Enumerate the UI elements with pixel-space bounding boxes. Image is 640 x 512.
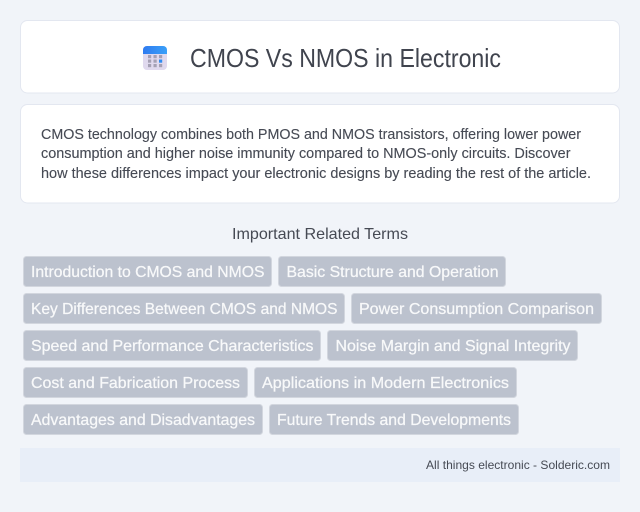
- panel: header card: [20, 20, 620, 93]
- tag: Future Trends and Developments: [277, 412, 511, 429]
- tag: [328, 330, 578, 360]
- tag: [24, 256, 272, 286]
- panel: related terms tags: [24, 256, 602, 434]
- tag: Basic Structure and Operation: [286, 264, 498, 281]
- tag: [24, 404, 262, 434]
- description text: CMOS technology combines both PMOS and NMOS transistors, offering lower power: [41, 127, 581, 143]
- panel: description card: [20, 104, 620, 203]
- title: CMOS Vs NMOS in Electronic: [190, 45, 501, 73]
- tag: Applications in Modern Electronics: [262, 375, 509, 392]
- description text: how these differences impact your electronic designs by reading the rest of the article.: [41, 166, 591, 182]
- tag: [24, 294, 344, 324]
- tag: Advantages and Disadvantages: [31, 412, 255, 429]
- tag: [278, 256, 506, 286]
- footer text: All things electronic - Solderic.com: [426, 458, 610, 472]
- tag: [270, 404, 518, 434]
- tag: [254, 368, 516, 398]
- footer bar: [20, 448, 620, 482]
- tag: [24, 368, 248, 398]
- icon: calendar: [143, 46, 167, 70]
- tag: [352, 294, 602, 324]
- description text: consumption and higher noise immunity compared to NMOS-only circuits. Discover: [41, 146, 571, 162]
- tag: Cost and Fabrication Process: [31, 375, 240, 392]
- tag: Speed and Performance Characteristics: [31, 338, 314, 355]
- tag: Introduction to CMOS and NMOS: [31, 264, 264, 281]
- heading: important related terms: Important Related Terms: [232, 226, 408, 243]
- tag: Noise Margin and Signal Integrity: [336, 338, 570, 355]
- tag: Key Differences Between CMOS and NMOS: [31, 301, 338, 318]
- tag: Power Consumption Comparison: [359, 301, 594, 318]
- tag: [24, 330, 320, 360]
- description text: [41, 127, 591, 182]
